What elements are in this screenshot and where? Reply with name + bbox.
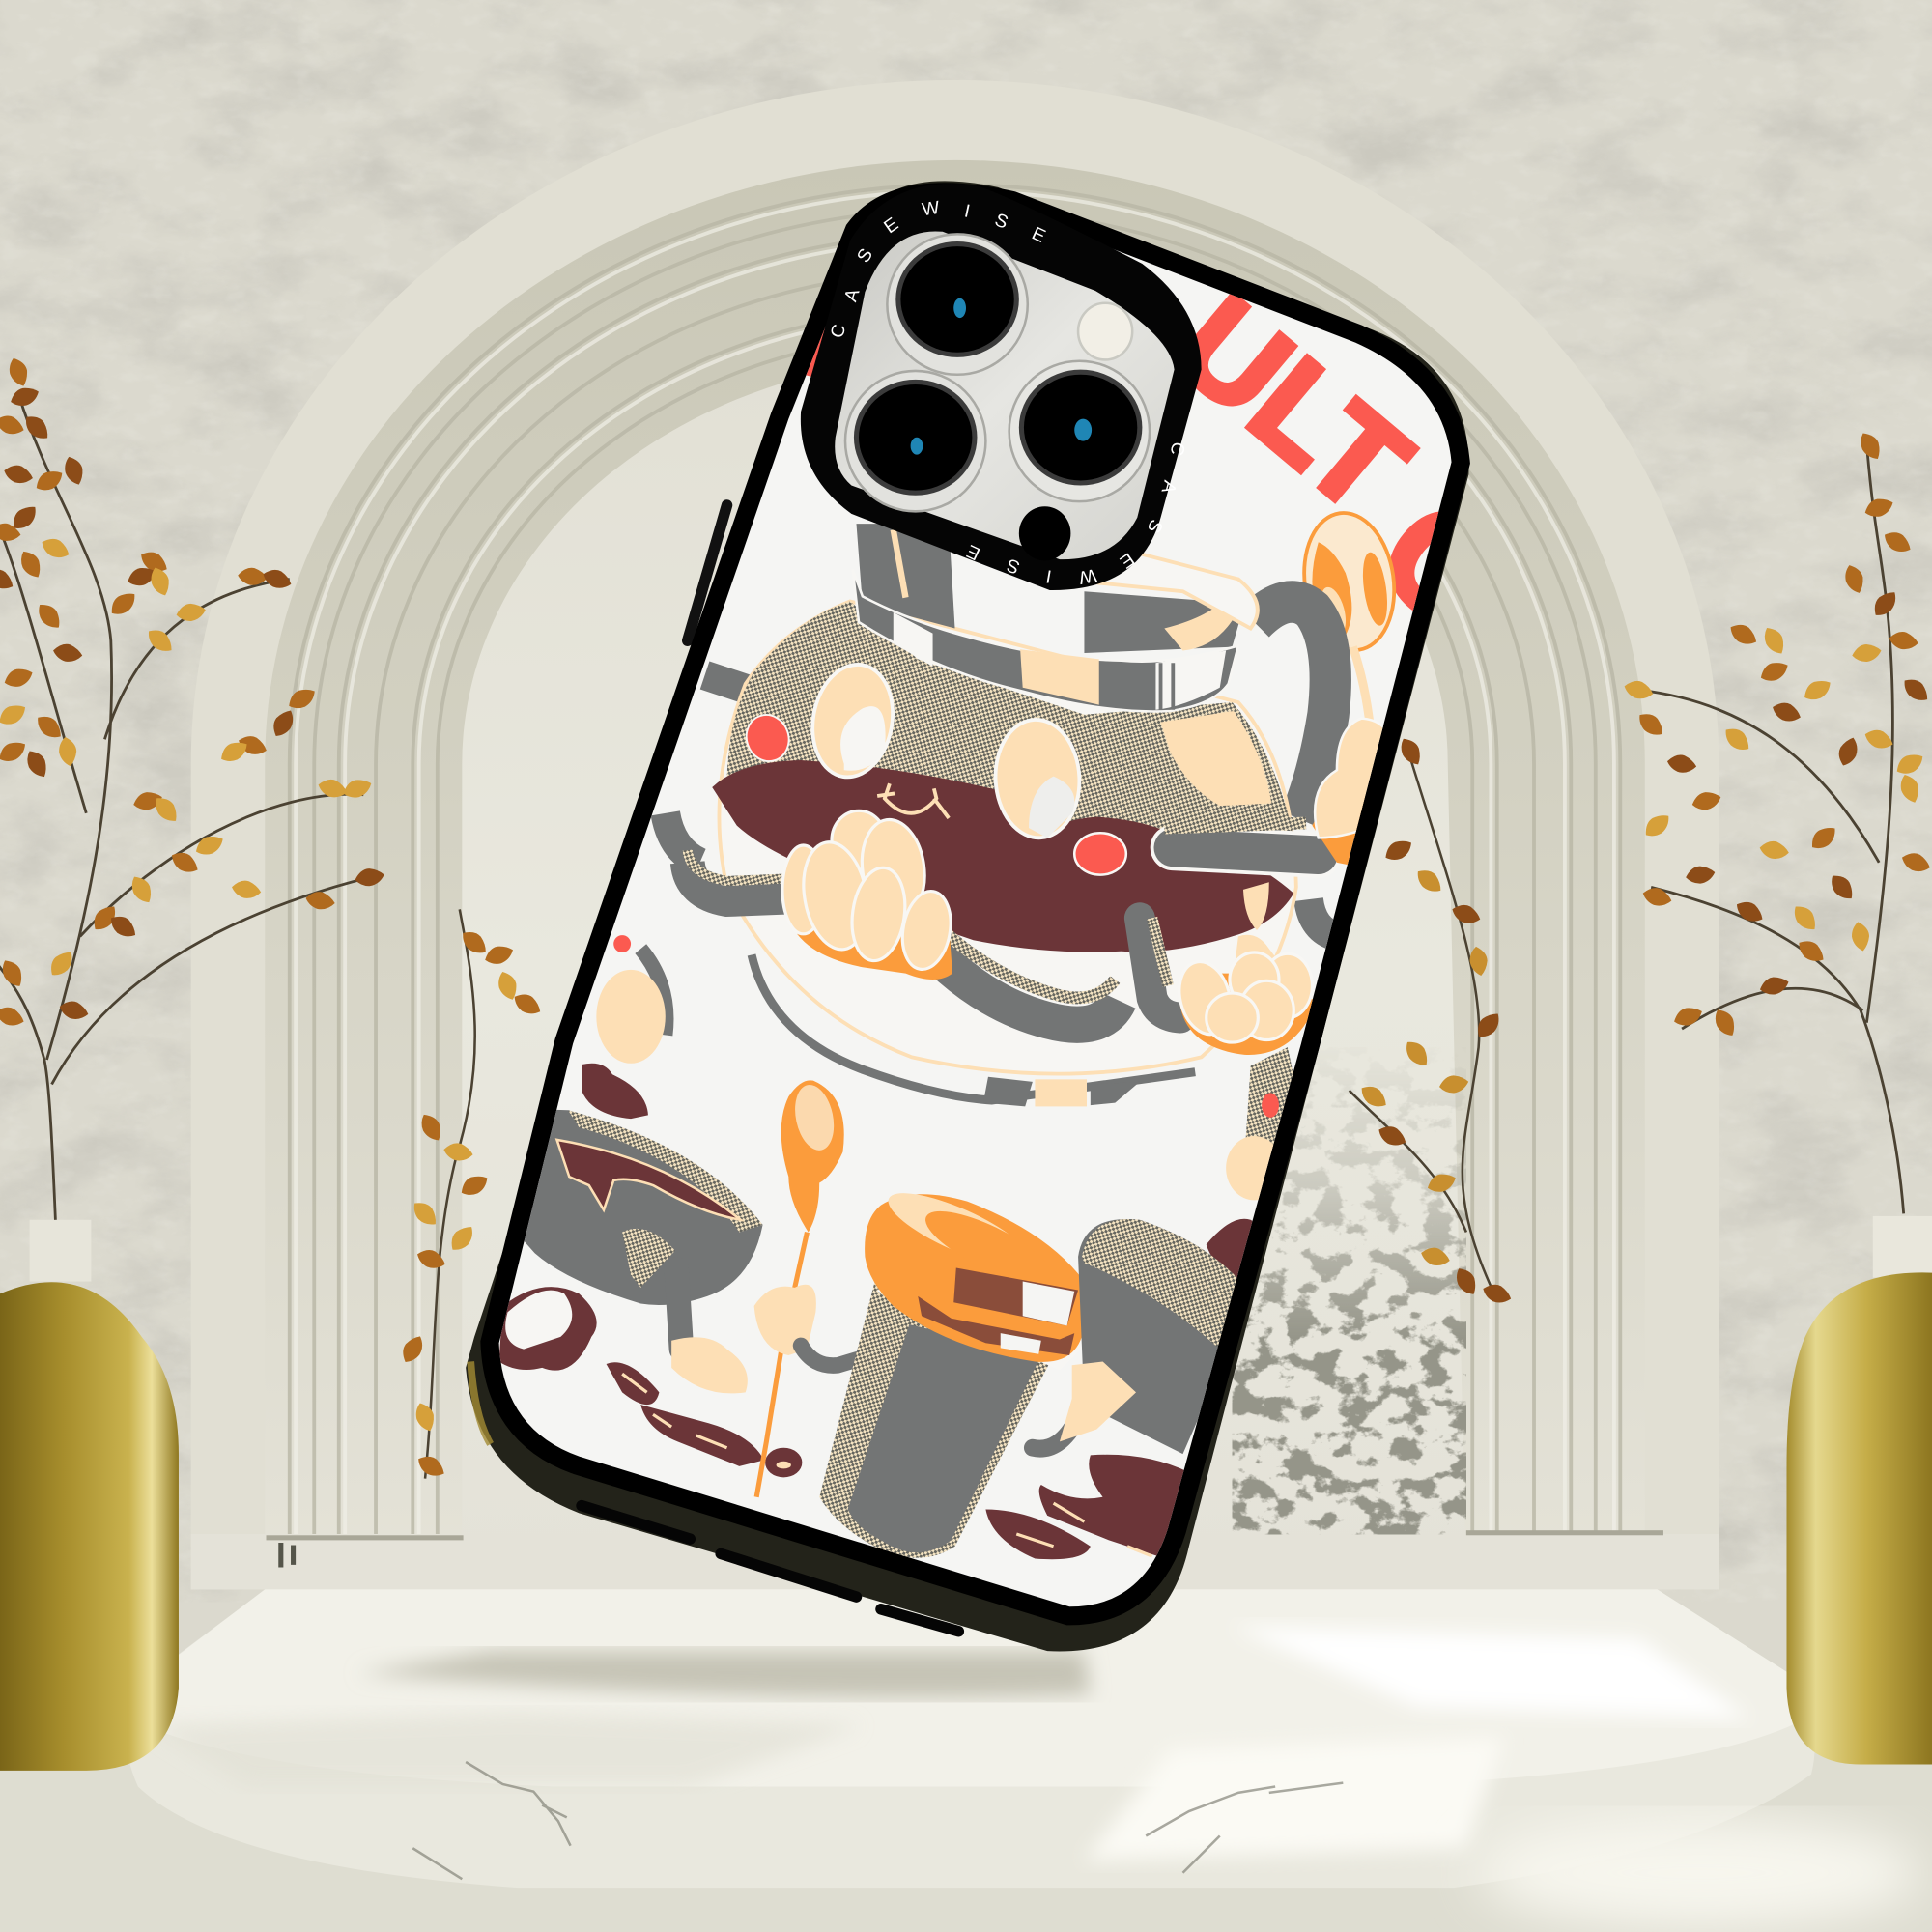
red title lettering: ULT	[1150, 268, 1435, 542]
left fist	[782, 810, 956, 980]
small right arm	[1140, 918, 1180, 1018]
phone side buttons	[589, 505, 727, 985]
pot handle	[1254, 602, 1330, 819]
lower arm	[933, 952, 1119, 1025]
bumper text top: W	[921, 198, 941, 220]
case printed artwork background	[499, 201, 1452, 1606]
hand holding spoon	[754, 1285, 816, 1355]
collar neck	[856, 524, 955, 629]
arch niche	[191, 80, 1719, 1589]
glass highlight	[1161, 711, 1271, 806]
right upper arm	[1173, 848, 1319, 855]
lower right fist	[1172, 935, 1316, 1055]
coffee spill right	[985, 1455, 1189, 1562]
bumper text top	[827, 198, 1048, 340]
left arm	[688, 863, 791, 899]
red cheek left	[746, 714, 790, 762]
coffee inside pot	[712, 760, 1293, 952]
bumper text bottom: S	[1143, 516, 1166, 536]
right golden branch plant	[1622, 429, 1932, 1213]
bumper text top: S	[854, 245, 877, 267]
bumper text top: E	[1029, 224, 1048, 247]
right eye	[992, 718, 1082, 840]
bumper text bottom	[964, 440, 1188, 587]
coffee spill left	[607, 1362, 802, 1477]
phone	[466, 181, 1532, 1652]
bumper text top: S	[992, 210, 1010, 234]
red cheek right	[1074, 833, 1126, 875]
marble veining on back wall	[1233, 1047, 1466, 1534]
bumper text bottom: S	[1005, 554, 1023, 578]
bean shape	[499, 1287, 597, 1371]
cup lid	[865, 1179, 1087, 1362]
collar ribbon	[853, 569, 1238, 711]
left gold vase	[0, 1220, 179, 1771]
top spoon	[1302, 511, 1397, 720]
grey bowl	[505, 1109, 763, 1393]
bumper text top: I	[962, 201, 972, 222]
camera bumper ring	[801, 184, 1202, 590]
bumper text bottom: I	[1044, 565, 1053, 586]
small arm	[801, 1346, 863, 1366]
pot back arms	[666, 675, 1337, 936]
small branch left of phone	[398, 909, 545, 1481]
bumper text top: A	[841, 286, 865, 304]
right lens	[1009, 361, 1150, 501]
marble platform	[126, 1589, 1922, 1928]
printed artwork	[499, 268, 1532, 1562]
small branch right of phone	[1350, 734, 1514, 1307]
pot base stripes	[752, 955, 1195, 1100]
right edge character	[1207, 1047, 1306, 1282]
flash	[1078, 303, 1132, 359]
left edge character	[596, 935, 667, 1064]
grey shaker character	[1033, 1219, 1251, 1454]
bumper text bottom: E	[1116, 548, 1138, 572]
takeaway cup	[819, 1179, 1087, 1558]
floor	[0, 1749, 1932, 1932]
top lens	[887, 234, 1028, 375]
halftone glass	[726, 601, 1293, 850]
upper right hand	[1312, 719, 1390, 868]
brown drip above bowl	[582, 1064, 648, 1119]
coffee pot	[666, 524, 1337, 1106]
bumper text top: E	[881, 214, 902, 238]
bottom speaker slots	[582, 1506, 958, 1632]
bumper text bottom: C	[1165, 440, 1188, 458]
lower spoon	[756, 1080, 844, 1497]
case rim	[499, 201, 1452, 1606]
bumper text bottom: E	[964, 540, 983, 564]
red title second word: C	[1350, 470, 1532, 659]
gold reflection on case corner	[470, 1361, 491, 1444]
camera plate	[835, 231, 1175, 559]
left eye	[810, 663, 895, 779]
left lens	[845, 371, 985, 511]
camera island	[801, 184, 1202, 590]
beige tooth mark	[1243, 882, 1269, 930]
bumper text top: C	[827, 322, 850, 340]
pot body outline	[719, 601, 1296, 1074]
phone case body	[466, 181, 1469, 1652]
smile	[877, 783, 949, 818]
right gold vase	[1786, 1216, 1932, 1765]
red title first letter	[806, 326, 826, 377]
left golden branch plant	[0, 355, 385, 1220]
bumper text bottom: W	[1077, 564, 1098, 587]
lidar sensor	[1019, 506, 1070, 560]
bumper text bottom: A	[1157, 478, 1179, 496]
